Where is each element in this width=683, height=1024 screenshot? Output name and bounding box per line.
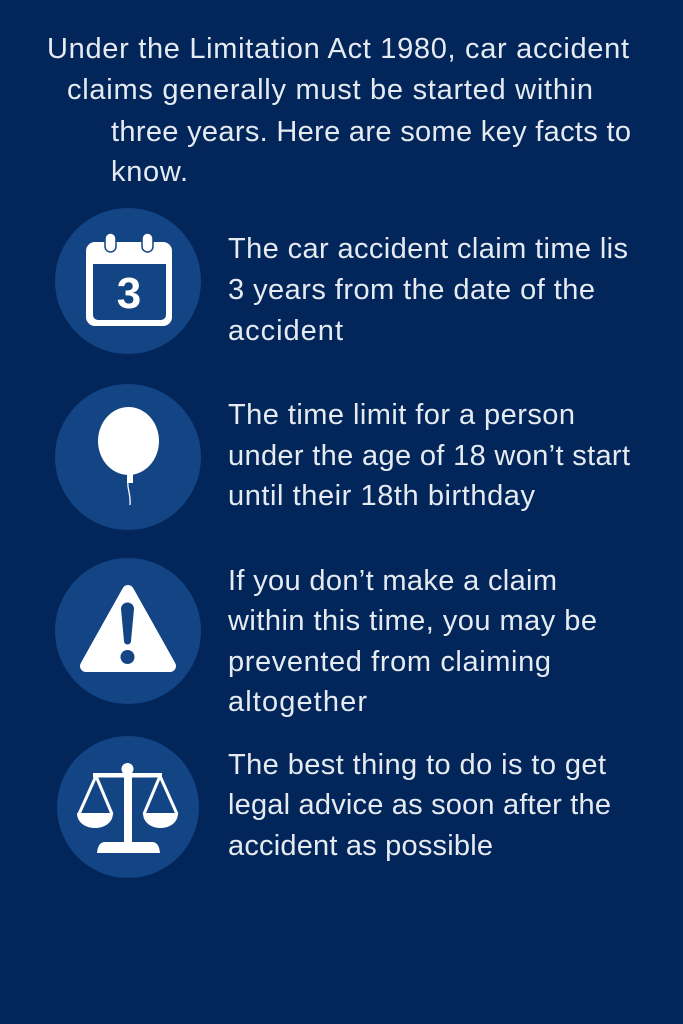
text: get legal advice bbox=[228, 749, 611, 862]
intro text block: know. bbox=[111, 156, 188, 188]
text: missing the deadline: If you don’t make a claim bbox=[228, 565, 557, 597]
panel: missing the deadline bbox=[55, 558, 597, 718]
text: under 18 rule: The time limit for a person bbox=[228, 399, 575, 431]
text: under 18 rule: under the age of 18 won’t start bbox=[228, 440, 630, 472]
text: three-year limit bbox=[228, 233, 628, 347]
icon: calendar with number 3 bbox=[55, 208, 201, 354]
icon: scales of justice bbox=[57, 736, 199, 878]
text: three-year limit: The car accident claim time lis bbox=[228, 233, 628, 265]
icon: balloon bbox=[55, 384, 201, 530]
text: get legal advice: accident as possible bbox=[228, 830, 493, 862]
text: under 18 rule: until their 18th birthday bbox=[228, 480, 536, 512]
text: get legal advice: legal advice as soon after the bbox=[228, 789, 611, 821]
intro text block: Under the Limitation Act 1980, car accident bbox=[47, 33, 629, 65]
text: missing the deadline: prevented from claiming bbox=[228, 646, 551, 678]
icon: warning triangle bbox=[55, 558, 201, 704]
intro text block bbox=[47, 33, 631, 188]
intro text block: three years. Here are some key facts to bbox=[111, 116, 631, 148]
text: under 18 rule bbox=[228, 399, 630, 512]
text: three-year limit: 3 years from the date of the bbox=[228, 274, 595, 306]
text: missing the deadline bbox=[227, 565, 597, 718]
text: missing the deadline: within this time, you may be bbox=[227, 605, 597, 637]
text: missing the deadline: altogether bbox=[228, 686, 367, 718]
text: three-year limit: accident bbox=[228, 315, 343, 347]
panel: get legal advice bbox=[57, 736, 611, 878]
intro text block: claims generally must be started within bbox=[67, 74, 593, 106]
text: get legal advice: The best thing to do is to get bbox=[228, 749, 606, 781]
panel: under 18 rule bbox=[55, 384, 630, 530]
icon: calendar with number 3: 3 bbox=[117, 269, 141, 318]
panel: three-year time limit bbox=[55, 208, 628, 354]
